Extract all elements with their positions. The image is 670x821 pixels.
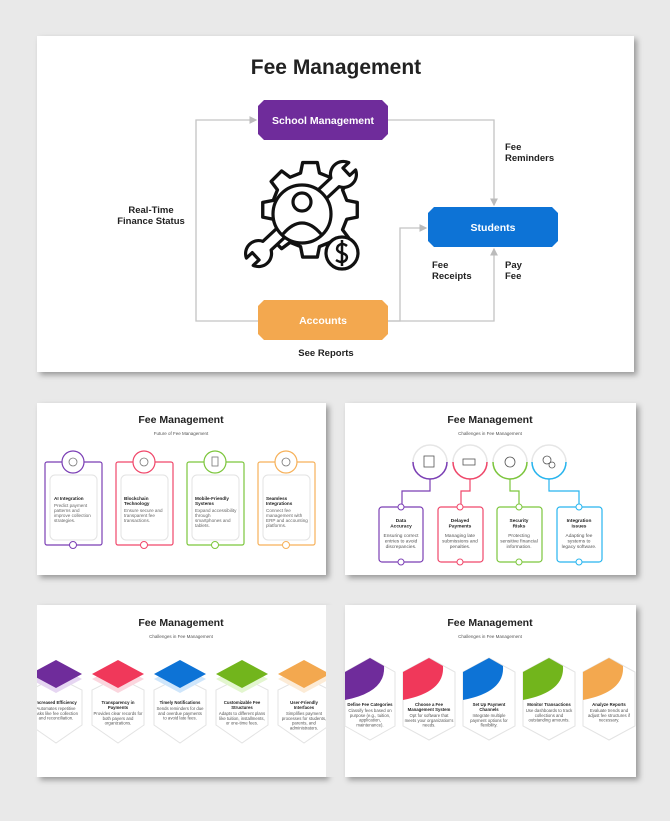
panel: benefits (hexagons): parents, and xyxy=(292,721,317,726)
panel: challenges (circles): Delayed xyxy=(451,518,469,524)
panel: steps (hexagons with curved colour): adjust fee structures if xyxy=(588,713,631,718)
panel: benefits (hexagons): administrators. xyxy=(290,725,318,730)
heading: Fee Management xyxy=(138,617,224,629)
panel: benefits (hexagons): Provides clear records for xyxy=(94,711,143,716)
panel: steps (hexagons with curved colour): Channels xyxy=(479,707,499,712)
panel: benefits (hexagons): Timely Notifications xyxy=(160,700,201,705)
cards: improve collection xyxy=(54,513,91,518)
label: fee reminders: Fee xyxy=(505,142,521,153)
cards: management with xyxy=(266,513,303,518)
panel: challenges (circles): legacy software. xyxy=(562,544,596,550)
box: Accounts xyxy=(258,300,388,340)
box: Students: Students xyxy=(471,222,516,234)
cards xyxy=(45,451,315,548)
label: pay fee: Pay xyxy=(505,260,523,271)
panel: challenges (circles): sensitive financial xyxy=(500,538,538,544)
panel: steps (hexagons with curved colour): Set Up Payment xyxy=(473,702,506,707)
subtitle: Challenges in Fee Management xyxy=(149,634,214,639)
panel: steps (hexagons with curved colour): Management System xyxy=(408,707,451,712)
panel: steps (hexagons with curved colour): collections and xyxy=(535,713,564,718)
connector lines xyxy=(196,120,494,321)
panel: steps (hexagons with curved colour): purpose (e.g., tuition, xyxy=(350,713,390,718)
cards: Connect fee xyxy=(266,508,291,513)
panel: benefits (hexagons): tasks like fee collection xyxy=(34,711,79,716)
panel: challenges (circles): discrepancies. xyxy=(386,544,416,550)
subtitle: Challenges in Fee Management xyxy=(458,634,523,639)
cards: patterns and xyxy=(54,508,80,513)
cards: Seamless xyxy=(266,496,288,501)
cards: strategies. xyxy=(54,518,75,523)
panel: steps (hexagons with curved colour): Opt for software that xyxy=(410,713,449,718)
panel: challenges (circles): Managing late xyxy=(445,533,475,539)
panel: challenges (circles): Protecting xyxy=(508,533,530,539)
title: Fee Management xyxy=(251,56,421,79)
panel: benefits (hexagons): and overdue payments xyxy=(158,711,202,716)
cards: Ensure secure and xyxy=(124,508,163,513)
panel: steps (hexagons with curved colour): Integrate multiple xyxy=(473,713,506,718)
panel: challenges (circles): penalties. xyxy=(450,544,470,550)
box: Accounts: Accounts xyxy=(299,315,347,327)
panel: benefits (hexagons): and reconciliation. xyxy=(39,716,73,721)
cards: Predict payment xyxy=(54,503,88,508)
panel: challenges (circles): Payments xyxy=(449,524,472,530)
panel: steps (hexagons with curved colour): Classify fees based on xyxy=(348,708,392,713)
panel: steps (hexagons with curved colour): maintenance). xyxy=(356,722,384,727)
panel: challenges (circles): Issues xyxy=(572,524,587,530)
cards: platforms. xyxy=(266,523,286,528)
panel: challenges (circles): Adapting fee xyxy=(566,533,593,539)
heading: Fee Management xyxy=(447,617,533,629)
heading: Fee Management xyxy=(447,414,533,426)
panel: challenges (circles): Security xyxy=(510,518,529,524)
panel: benefits (hexagons): or one-time fees. xyxy=(226,721,258,726)
panel: steps (hexagons with curved colour): Use dashboards to track xyxy=(526,708,573,713)
panel: benefits (hexagons): like tuition, installments, xyxy=(219,716,265,721)
subtitle: Challenges in Fee Management xyxy=(458,431,523,436)
panel: steps (hexagons with curved colour): payment options for xyxy=(470,718,508,723)
panel: steps (hexagons with curved colour): needs. xyxy=(423,723,435,728)
panel: challenges (circles): submissions and xyxy=(442,538,478,544)
panel: benefits (hexagons): Interfaces xyxy=(294,705,315,710)
panel: steps (hexagons with curved colour): outstanding amounts. xyxy=(528,718,570,723)
box: School Management: School Management xyxy=(272,115,375,127)
cards: AI Integration xyxy=(54,496,84,501)
panel: steps (hexagons with curved colour): Evaluate trends and xyxy=(590,708,629,713)
panel: benefits (hexagons): Sends reminders for due xyxy=(156,706,204,711)
cards: transactions. xyxy=(124,518,150,523)
panel: benefits (hexagons): organizations. xyxy=(105,721,131,726)
label: see reports: See Reports xyxy=(298,348,354,359)
panel: benefits (hexagons): both payers and xyxy=(103,716,134,721)
panel: benefits (hexagons): to avoid late fees. xyxy=(163,716,197,721)
panel: challenges (circles): Risks xyxy=(513,524,526,530)
panel: steps (hexagons with curved colour): Analyze Reports xyxy=(592,702,626,707)
panel: steps (hexagons with curved colour): application, xyxy=(359,718,381,723)
cards: transparent fee xyxy=(124,513,155,518)
cards: smartphones and xyxy=(195,518,231,523)
icon: gear with wrench, person and dollar xyxy=(241,157,361,271)
label: fee receipts: Fee xyxy=(432,260,448,271)
cards: tablets. xyxy=(195,523,210,528)
panel: benefits (hexagons): Customizable Fee xyxy=(224,700,261,705)
panel: steps (hexagons with curved colour) xyxy=(345,605,636,777)
cards: Technology xyxy=(124,501,150,506)
panel: benefits (hexagons) xyxy=(20,605,346,777)
panel: steps (hexagons with curved colour): Monitor Transactions xyxy=(527,702,571,707)
panel: benefits (hexagons): Transparency in xyxy=(102,700,135,705)
panel: benefits (hexagons): Increased Efficiency xyxy=(35,700,77,705)
label: real-time finance status: Real-Time xyxy=(128,205,174,216)
panel: challenges (circles): Accuracy xyxy=(390,524,412,530)
panel: steps (hexagons with curved colour): flexibility. xyxy=(480,723,498,728)
box: Students xyxy=(428,207,558,247)
panel: challenges (circles): Data xyxy=(396,518,407,524)
panel: benefits (hexagons): Structures xyxy=(231,705,253,710)
panel: benefits (hexagons): Payments xyxy=(108,705,129,710)
heading: Fee Management xyxy=(138,414,224,426)
cards: through xyxy=(195,513,211,518)
panel: benefits (hexagons): processes for students, xyxy=(282,716,326,721)
panel: challenges (circles): information. xyxy=(506,544,532,550)
panel: main fee management diagram xyxy=(37,36,634,372)
subtitle: Future of Fee Management xyxy=(154,431,209,436)
label: fee reminders: Reminders xyxy=(505,153,554,164)
label: fee receipts: Receipts xyxy=(432,271,472,282)
panel: challenges (circles): entries to avoid xyxy=(385,538,418,544)
panel: challenges (circles): Integration xyxy=(567,518,591,524)
panel: steps (hexagons with curved colour): Choose a Fee xyxy=(415,702,444,707)
panel: challenges (circles): systems to xyxy=(568,538,591,544)
panel: benefits (hexagons): User-Friendly xyxy=(290,700,318,705)
cards: ERP and accounting xyxy=(266,518,308,523)
panel: challenges (circles) xyxy=(345,403,636,575)
panel: benefits (hexagons): Simplifies payment xyxy=(286,711,323,716)
panel: benefits (hexagons): Adapts to different plans xyxy=(219,711,265,716)
box: School Management xyxy=(258,100,388,140)
panel: steps (hexagons with curved colour): Define Fee Categories xyxy=(347,702,393,707)
panel: future of fee management xyxy=(37,403,326,575)
label: pay fee: Fee xyxy=(505,271,521,282)
panel: steps (hexagons with curved colour): necessary. xyxy=(599,718,619,723)
label: real-time finance status: Finance Status xyxy=(117,216,185,227)
cards: Blockchain xyxy=(124,496,149,501)
panel: steps (hexagons with curved colour): meets your organization's xyxy=(405,718,453,723)
cards: Mobile-Friendly xyxy=(195,496,229,501)
panel: benefits (hexagons): Automates repetitive xyxy=(36,706,76,711)
cards: Integrations xyxy=(266,501,293,506)
panel: challenges (circles): Ensuring correct xyxy=(384,533,419,539)
cards: Systems xyxy=(195,501,214,506)
cards: Expand accessibility xyxy=(195,508,237,513)
